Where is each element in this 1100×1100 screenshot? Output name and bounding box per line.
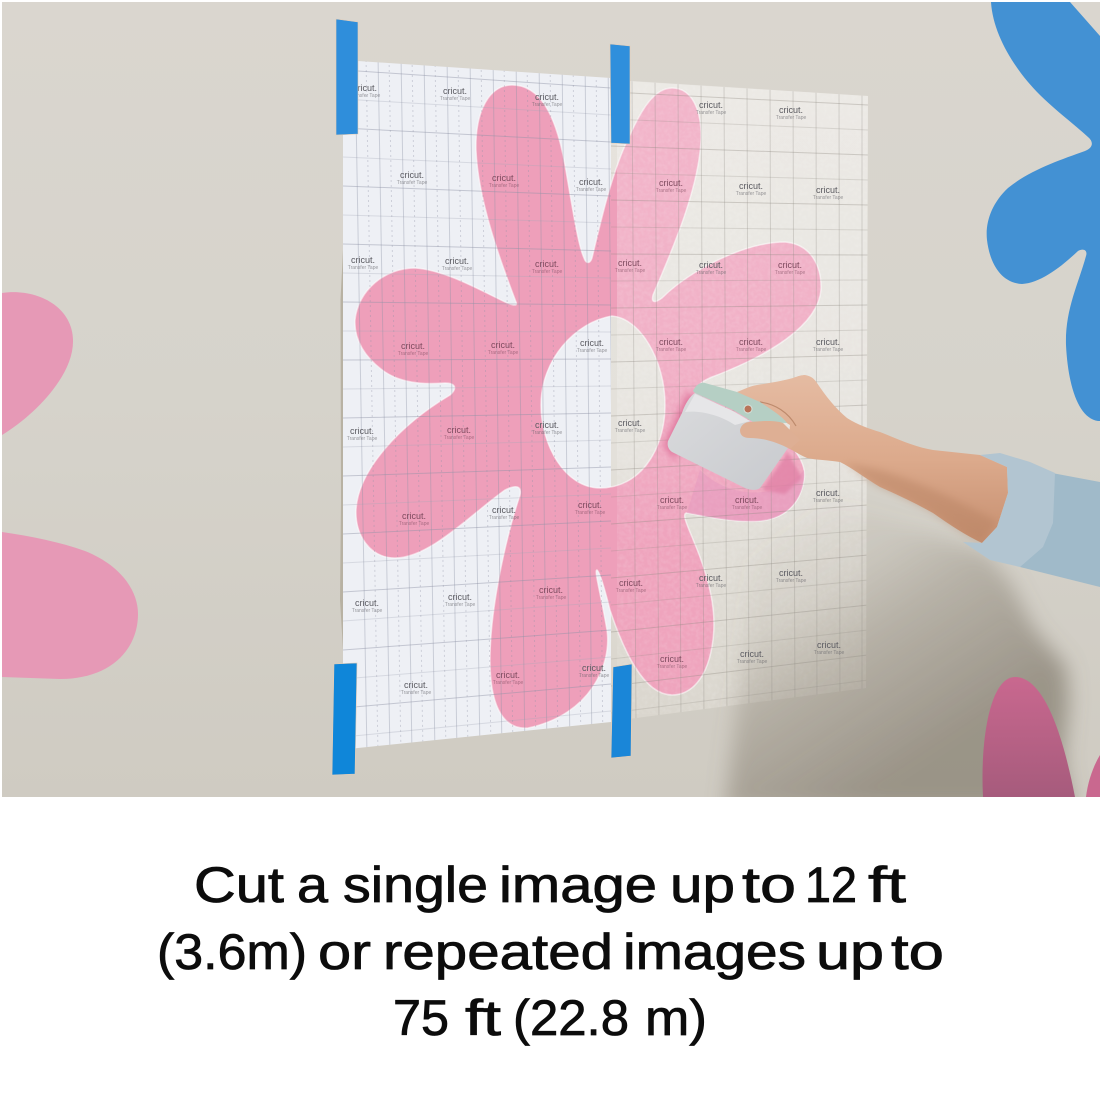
line 3 [393, 990, 707, 1046]
cricut watermark labels: cricut. [579, 177, 603, 187]
cricut watermark labels: cricut. [353, 83, 377, 93]
cricut watermark labels: cricut. [350, 426, 374, 436]
line 2 [157, 924, 944, 980]
cricut watermark labels: Transfer Tape [347, 436, 378, 442]
cricut watermark labels: cricut. [660, 495, 684, 505]
cricut watermark labels: Transfer Tape [532, 269, 563, 275]
cricut watermark labels: Transfer Tape [579, 673, 610, 679]
cricut watermark labels: cricut. [816, 337, 840, 347]
arm shadow on wall and film [725, 500, 1072, 810]
line 2: to [891, 924, 944, 980]
cricut watermark labels: cricut. [817, 640, 841, 650]
cricut watermark labels: cricut. [402, 511, 426, 521]
arm and hand [737, 375, 1008, 543]
cricut watermark labels: Transfer Tape [401, 690, 432, 696]
cricut watermark labels: Transfer Tape [399, 521, 430, 527]
cricut watermark labels: Transfer Tape [737, 659, 768, 665]
film wrinkle texture [617, 140, 774, 688]
line 1 [194, 857, 906, 913]
cricut watermark labels: cricut. [492, 505, 516, 515]
cricut watermark labels: cricut. [735, 495, 759, 505]
decal: pink petal left lower [2, 532, 138, 679]
cricut watermark labels: cricut. [779, 105, 803, 115]
cricut watermark labels: cricut. [739, 181, 763, 191]
line 1: image [499, 857, 657, 913]
cricut watermark labels: cricut. [535, 92, 559, 102]
grid lines: right sheet [611, 80, 868, 725]
cricut watermark labels [347, 83, 845, 696]
cricut watermark labels: cricut. [448, 592, 472, 602]
cricut watermark labels: cricut. [580, 338, 604, 348]
cricut watermark labels: cricut. [539, 585, 563, 595]
cricut watermark labels: Transfer Tape [577, 348, 608, 354]
cricut watermark labels: cricut. [778, 260, 802, 270]
cricut watermark labels: Transfer Tape [776, 578, 807, 584]
line 2: (3.6m) [157, 924, 307, 980]
cricut watermark labels: cricut. [447, 425, 471, 435]
scraper blade [668, 393, 788, 490]
line 3: ft [465, 990, 501, 1046]
cricut watermark labels: Transfer Tape [696, 110, 727, 116]
pressed area tint [687, 470, 804, 521]
white backed transfer sheet [343, 60, 611, 750]
line 2: images [623, 924, 806, 980]
blue tape: bottom middle [611, 664, 632, 758]
cricut watermark labels: cricut. [401, 341, 425, 351]
cricut watermark labels: Transfer Tape [616, 588, 647, 594]
blue tape: top middle [610, 44, 630, 144]
cricut watermark labels: Transfer Tape [536, 595, 567, 601]
line 1: 12 [805, 857, 857, 913]
scraper shadow on pink [664, 392, 700, 460]
cricut watermark labels: Transfer Tape [348, 265, 379, 271]
grid lines: left sheet [343, 55, 615, 755]
cricut watermark labels: cricut. [659, 337, 683, 347]
line 1: single [343, 857, 488, 913]
cricut watermark labels: Transfer Tape [732, 505, 763, 511]
cricut watermark labels: cricut. [618, 258, 642, 268]
cricut watermark labels: Transfer Tape [656, 347, 687, 353]
cricut watermark labels: Transfer Tape [615, 268, 646, 274]
scraper button [744, 405, 752, 413]
decal: blue flower right [987, 2, 1100, 421]
cricut watermark labels: Transfer Tape [575, 510, 606, 516]
line 3: (22.8 [513, 990, 629, 1046]
cricut watermark labels: Transfer Tape [398, 351, 429, 357]
line 1: ft [868, 857, 906, 913]
line 3: m) [645, 990, 707, 1046]
forearm underside shading [848, 466, 990, 543]
scraper mint handle [693, 383, 787, 423]
cricut watermark labels: Transfer Tape [532, 102, 563, 108]
cricut watermark labels: Transfer Tape [696, 270, 727, 276]
cricut watermark labels: Transfer Tape [615, 428, 646, 434]
transparent transfer sheet [611, 80, 868, 722]
cricut watermark labels: Transfer Tape [813, 347, 844, 353]
cricut watermark labels: Transfer Tape [488, 350, 519, 356]
cricut watermark labels: Transfer Tape [776, 115, 807, 121]
cricut watermark labels: Transfer Tape [696, 583, 727, 589]
scraper blade highlight [685, 394, 750, 425]
cricut watermark labels: Transfer Tape [489, 183, 520, 189]
sheet edge shadow [340, 250, 343, 650]
line 2: or [318, 924, 371, 980]
cricut watermark labels: cricut. [699, 573, 723, 583]
caption heading [157, 857, 944, 1046]
cricut watermark labels: cricut. [496, 670, 520, 680]
film sheen over right half [617, 81, 820, 486]
cricut watermark labels: Transfer Tape [350, 93, 381, 99]
cricut watermark labels: cricut. [578, 500, 602, 510]
decal: dark pink petal bottom right [982, 677, 1075, 797]
cricut watermark labels: cricut. [619, 578, 643, 588]
cricut watermark labels: cricut. [582, 663, 606, 673]
cricut watermark labels: cricut. [659, 178, 683, 188]
cricut watermark labels: Transfer Tape [440, 96, 471, 102]
cricut watermark labels: Transfer Tape [656, 188, 687, 194]
cricut watermark labels: Transfer Tape [775, 270, 806, 276]
cricut watermark labels: cricut. [740, 649, 764, 659]
cricut watermark labels: cricut. [404, 680, 428, 690]
cricut watermark labels: Transfer Tape [532, 430, 563, 436]
cricut watermark labels: cricut. [351, 255, 375, 265]
rolled denim cuff [963, 453, 1055, 567]
line 2: up [816, 924, 884, 980]
cricut watermark labels: cricut. [535, 420, 559, 430]
cricut watermark labels: cricut. [699, 100, 723, 110]
cricut watermark labels: cricut. [535, 259, 559, 269]
cricut watermark labels: cricut. [660, 654, 684, 664]
line 1: to [742, 857, 796, 913]
blue tape: bottom left [332, 663, 357, 775]
cricut watermark labels: cricut. [779, 568, 803, 578]
cricut watermark labels: Transfer Tape [444, 435, 475, 441]
cricut watermark labels: cricut. [355, 598, 379, 608]
cricut watermark labels: cricut. [491, 340, 515, 350]
line 1: Cut [194, 857, 284, 913]
cricut watermark labels: Transfer Tape [352, 608, 383, 614]
cricut watermark labels: cricut. [816, 185, 840, 195]
scraper shadow lower right [762, 452, 802, 494]
blue tape: top left [336, 19, 358, 135]
cricut watermark labels: Transfer Tape [736, 347, 767, 353]
line 1: a [297, 857, 328, 913]
cricut watermark labels: Transfer Tape [493, 680, 524, 686]
cricut watermark labels: cricut. [400, 170, 424, 180]
wall background [2, 2, 1100, 797]
cricut watermark labels: Transfer Tape [813, 498, 844, 504]
cricut watermark labels: Transfer Tape [813, 195, 844, 201]
decal: pink petal left upper [2, 292, 73, 435]
cricut watermark labels: cricut. [699, 260, 723, 270]
large pink flower decal [355, 85, 821, 728]
cricut watermark labels: Transfer Tape [442, 266, 473, 272]
thumb over scraper [740, 421, 790, 449]
cricut watermark labels: cricut. [445, 256, 469, 266]
finger crease [760, 402, 796, 426]
line 2: repeated [383, 924, 613, 980]
line 3: 75 [393, 990, 449, 1046]
cricut watermark labels: Transfer Tape [657, 664, 688, 670]
cricut watermark labels: cricut. [492, 173, 516, 183]
cricut watermark labels: cricut. [739, 337, 763, 347]
denim sleeve forearm [1020, 473, 1100, 587]
scraper tool [668, 383, 788, 490]
cricut watermark labels: cricut. [443, 86, 467, 96]
cricut watermark labels: cricut. [618, 418, 642, 428]
cricut watermark labels: Transfer Tape [814, 650, 845, 656]
cricut watermark labels: Transfer Tape [576, 187, 607, 193]
line 1: up [670, 857, 735, 913]
cricut watermark labels: cricut. [816, 488, 840, 498]
photo: wall with flower decal application [2, 2, 1100, 810]
cricut watermark labels: Transfer Tape [445, 602, 476, 608]
cricut watermark labels: Transfer Tape [397, 180, 428, 186]
cricut watermark labels: Transfer Tape [489, 515, 520, 521]
cricut watermark labels: Transfer Tape [657, 505, 688, 511]
decal: small pink petal corner [1086, 755, 1100, 797]
cricut watermark labels: Transfer Tape [736, 191, 767, 197]
